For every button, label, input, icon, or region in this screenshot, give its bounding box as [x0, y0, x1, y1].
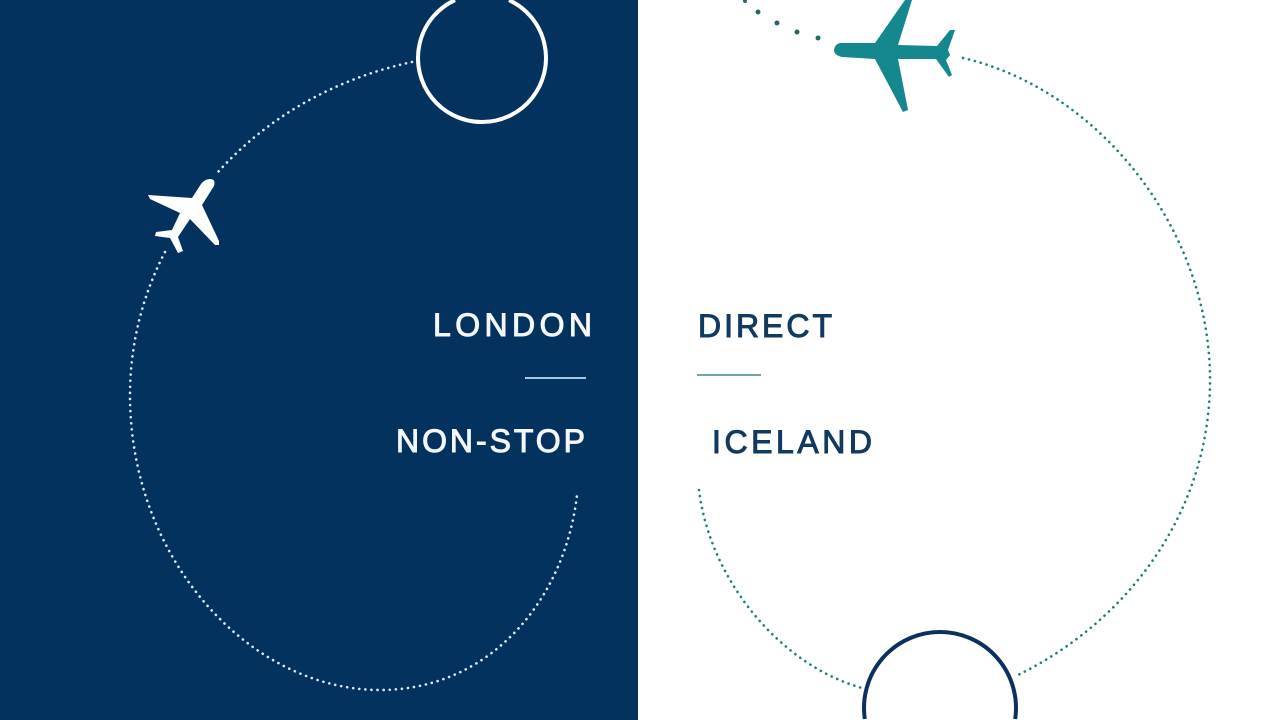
divider: left panel rule: [525, 377, 586, 379]
text: LONDON: LONDON: [433, 307, 592, 343]
circle: bottom destination ring: [864, 632, 1016, 719]
divider: right panel rule: [697, 374, 761, 376]
icon: teal plane: [834, 0, 955, 112]
text: ICELAND: ICELAND: [712, 424, 872, 460]
text: NON-STOP: NON-STOP: [396, 423, 585, 459]
panel: navy left half: [0, 0, 638, 720]
dotted route: top teal dots: [743, 0, 820, 40]
dotted route: left panel main arc: [130, 252, 577, 690]
dotted route: right panel large arc: [963, 58, 1210, 675]
dotted route: left panel upper arc: [218, 62, 412, 172]
icon: white plane: [148, 179, 219, 253]
text: DIRECT: DIRECT: [698, 308, 832, 344]
dotted route: right panel lower arc: [699, 490, 862, 688]
circle: top departure ring: [418, 0, 546, 122]
